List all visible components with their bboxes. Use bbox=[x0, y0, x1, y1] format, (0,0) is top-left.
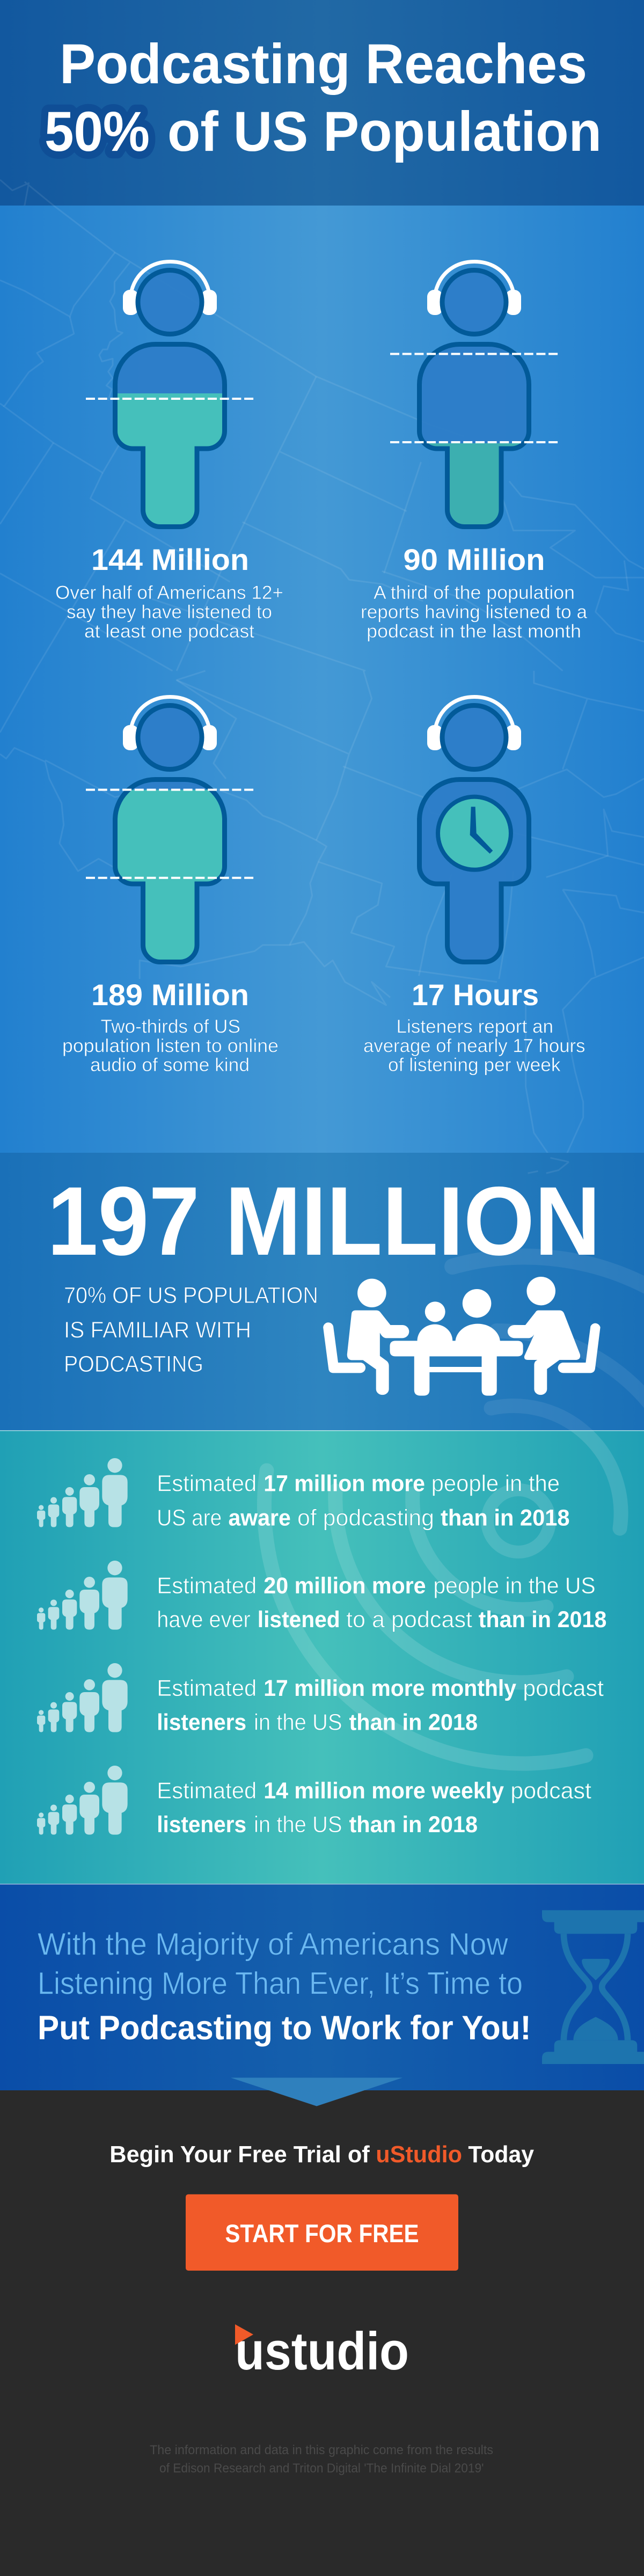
row text: listened bbox=[258, 1607, 340, 1633]
row text: aware bbox=[229, 1505, 291, 1531]
icon: person with headphones, half filled bbox=[86, 262, 254, 533]
stat description: reports having listened to a bbox=[361, 602, 588, 623]
growth row: aware bbox=[37, 1458, 570, 1531]
stat description: say they have listened to bbox=[67, 602, 272, 623]
stat description: Two-thirds of US bbox=[101, 1016, 240, 1037]
logo: ustudio: ustudio bbox=[235, 2321, 409, 2381]
free trial heading bbox=[109, 2141, 535, 2168]
stat heading: 189 Million bbox=[91, 978, 249, 1012]
row text: Estimated bbox=[157, 1675, 257, 1701]
stat description: of listening per week bbox=[388, 1055, 561, 1075]
source note bbox=[150, 2443, 493, 2476]
icon: growing people bbox=[37, 1561, 128, 1630]
title bbox=[45, 33, 602, 163]
row text: listeners bbox=[157, 1812, 246, 1838]
row text: Estimated bbox=[157, 1573, 257, 1599]
row text: in the US bbox=[254, 1710, 342, 1736]
icon: growing people bbox=[37, 1663, 128, 1732]
row text: 17 million more bbox=[264, 1471, 425, 1497]
row text bbox=[157, 1778, 591, 1838]
icon: person with headphones, legs filled bbox=[390, 262, 558, 535]
stat description bbox=[363, 1016, 585, 1075]
row text: than in 2018 bbox=[349, 1812, 478, 1838]
stat description bbox=[361, 582, 588, 642]
panel: 197 million bbox=[0, 1153, 644, 1430]
free trial heading: Begin Your Free Trial of bbox=[109, 2141, 370, 2168]
call to action heading: Listening More Than Ever, It’s Time to bbox=[38, 1966, 523, 2001]
panel: free trial footer bbox=[0, 2078, 644, 2576]
row text bbox=[157, 1471, 570, 1531]
stat figure: 90 million bbox=[361, 262, 588, 642]
row text: Estimated bbox=[157, 1471, 257, 1497]
icon: family at table bbox=[323, 1277, 601, 1396]
description text: PODCASTING bbox=[64, 1351, 203, 1377]
row text: people in the bbox=[431, 1471, 560, 1497]
title: Podcasting Reaches bbox=[60, 33, 587, 96]
stat description: at least one podcast bbox=[84, 621, 254, 642]
stat description: average of nearly 17 hours bbox=[363, 1036, 585, 1057]
source note: The information and data in this graphic come from the results bbox=[150, 2443, 493, 2457]
stat description: Over half of Americans 12+ bbox=[55, 582, 283, 603]
stat heading: 144 Million bbox=[91, 543, 249, 576]
icon: hourglass bbox=[542, 1910, 644, 2064]
description text: IS FAMILIAR WITH bbox=[64, 1318, 251, 1343]
stat description: podcast in the last month bbox=[367, 621, 581, 642]
arrow pointing down bbox=[231, 2078, 402, 2106]
row text: to a podcast bbox=[346, 1607, 472, 1633]
icon: growing people bbox=[37, 1458, 128, 1527]
row text: than in 2018 bbox=[349, 1710, 478, 1736]
button: start for free bbox=[186, 2194, 458, 2271]
row text: people in the US bbox=[433, 1573, 596, 1599]
growth row: monthly bbox=[37, 1663, 604, 1736]
stat description: population listen to online bbox=[62, 1036, 279, 1057]
row text: Estimated bbox=[157, 1778, 257, 1804]
row text: 17 million more monthly bbox=[264, 1675, 516, 1701]
row text: have ever bbox=[157, 1607, 251, 1633]
stat figure: 144 million bbox=[55, 262, 283, 642]
growth row: weekly bbox=[37, 1766, 591, 1838]
row text: than in 2018 bbox=[441, 1505, 570, 1531]
stat description: A third of the population bbox=[374, 582, 575, 603]
description text bbox=[64, 1283, 318, 1377]
stat heading: 90 Million bbox=[404, 543, 545, 576]
stat figure: 189 million bbox=[62, 697, 279, 1075]
panel: listener statistics over US map bbox=[0, 206, 644, 1154]
icon: growing people bbox=[37, 1766, 128, 1835]
call to action heading bbox=[38, 1927, 531, 2047]
US map outline background bbox=[0, 206, 644, 1154]
title: 50% bbox=[45, 100, 150, 163]
row text: 20 million more bbox=[264, 1573, 426, 1599]
panel: header bbox=[0, 0, 644, 223]
row text: in the US bbox=[254, 1812, 342, 1838]
stat description bbox=[62, 1016, 279, 1075]
stat description: audio of some kind bbox=[90, 1055, 250, 1075]
big number heading: 197 MILLION bbox=[47, 1166, 601, 1276]
title: of US Population bbox=[167, 100, 602, 163]
row text: podcast bbox=[510, 1778, 591, 1804]
stat heading: 17 Hours bbox=[412, 978, 539, 1012]
row text: US are bbox=[157, 1505, 222, 1531]
icon: clock bbox=[438, 797, 511, 870]
call to action heading: With the Majority of Americans Now bbox=[38, 1927, 509, 1962]
description text: 70% OF US POPULATION bbox=[64, 1283, 318, 1308]
row text: 14 million more weekly bbox=[264, 1778, 504, 1804]
row text: than in 2018 bbox=[479, 1607, 606, 1633]
source note: of Edison Research and Triton Digital 'The Infinite Dial 2019' bbox=[159, 2461, 484, 2476]
free trial heading: Today bbox=[468, 2141, 535, 2168]
stat description: Listeners report an bbox=[396, 1016, 553, 1037]
stat description bbox=[55, 582, 283, 642]
row text: podcast bbox=[523, 1675, 604, 1701]
icon: person with headphones and clock bbox=[420, 697, 529, 962]
button: start for free: START FOR FREE bbox=[225, 2219, 419, 2248]
title: 50% bbox=[45, 100, 150, 163]
panel: call to action message bbox=[0, 1884, 644, 2090]
stat figure: 17 hours bbox=[363, 697, 585, 1075]
call to action heading: Put Podcasting to Work for You! bbox=[38, 2009, 531, 2047]
row text: of podcasting bbox=[297, 1505, 434, 1531]
icon: person with headphones, mostly filled bbox=[86, 697, 254, 970]
free trial heading: uStudio bbox=[376, 2141, 462, 2168]
growth row: listened bbox=[37, 1561, 606, 1633]
row text bbox=[157, 1675, 604, 1736]
panel: year over year growth bbox=[0, 1406, 644, 1884]
row text: listeners bbox=[157, 1710, 246, 1736]
row text bbox=[157, 1573, 606, 1633]
